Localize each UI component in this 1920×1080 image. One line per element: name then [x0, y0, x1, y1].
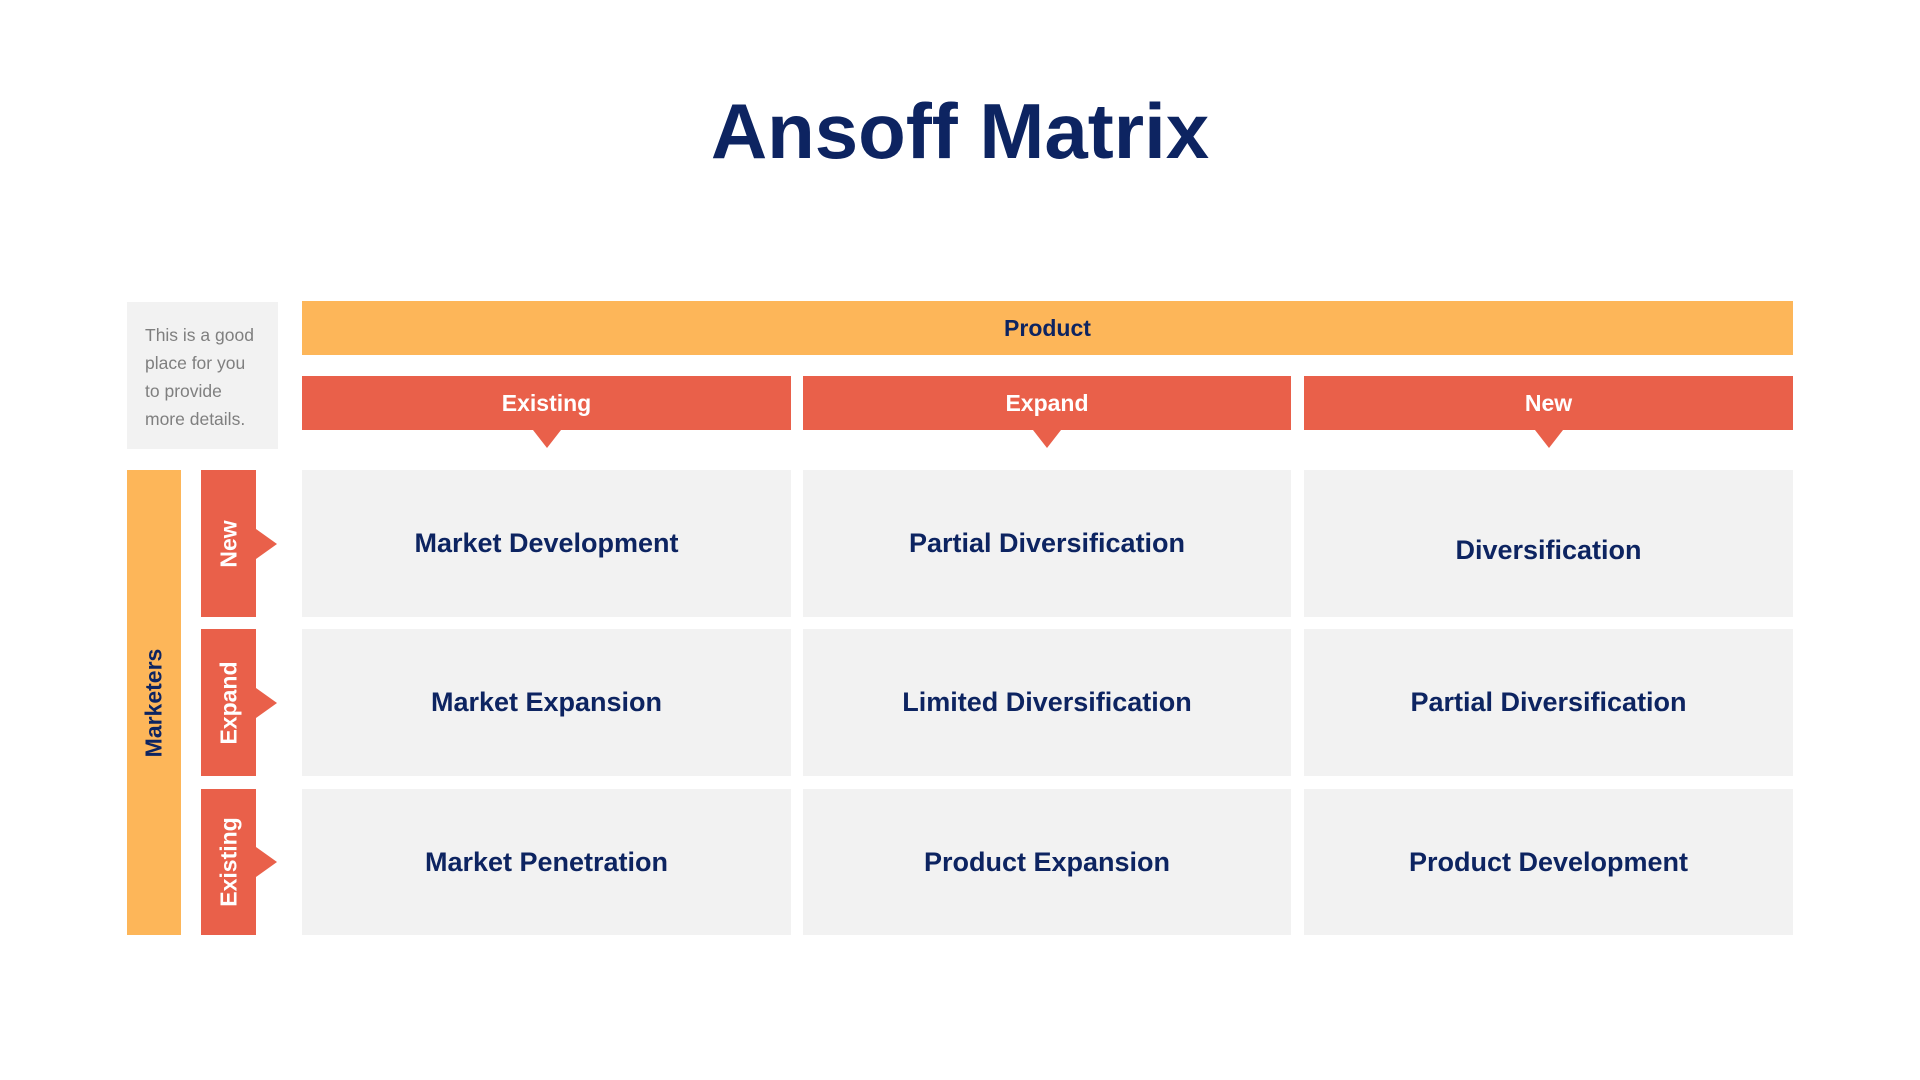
column header: new: New — [1525, 390, 1572, 416]
cell: market development — [302, 470, 791, 617]
cell: limited diversification: Limited Diversification — [902, 687, 1192, 717]
marketers bar: Marketers — [140, 648, 166, 757]
row label: expand: Expand — [215, 661, 241, 744]
marketers bar — [127, 470, 181, 935]
cell: market penetration — [302, 789, 791, 935]
row label: expand — [201, 629, 256, 776]
column header: expand: Expand — [1005, 390, 1089, 416]
column header: existing — [302, 376, 791, 430]
note box — [127, 302, 278, 449]
cell: partial diversification 2: Partial Diversification — [1410, 687, 1687, 717]
cell: product expansion — [803, 789, 1291, 935]
cell: market development: Market Development — [414, 528, 679, 558]
cell: diversification — [1304, 470, 1793, 617]
cell: product development — [1304, 789, 1793, 935]
cell: diversification: Diversification — [1455, 535, 1642, 565]
row label: existing — [201, 789, 256, 935]
row label: new — [201, 470, 256, 617]
cell: limited diversification — [803, 629, 1291, 776]
cell: market expansion — [302, 629, 791, 776]
column header: new — [1304, 376, 1793, 430]
product bar — [302, 301, 1793, 355]
row label: existing: Existing — [215, 817, 241, 907]
row label: new: New — [215, 520, 241, 567]
title: Ansoff Matrix — [711, 87, 1209, 175]
cell: partial diversification 2 — [1304, 629, 1793, 776]
cell: market expansion: Market Expansion — [431, 687, 662, 717]
cell: market penetration: Market Penetration — [425, 846, 668, 876]
cell: product expansion: Product Expansion — [924, 846, 1170, 876]
cell: partial diversification: Partial Diversification — [909, 528, 1185, 558]
column header: expand — [803, 376, 1291, 430]
column header: existing: Existing — [502, 390, 591, 416]
product bar: Product — [1004, 314, 1091, 340]
cell: partial diversification — [803, 470, 1291, 617]
cell: product development: Product Development — [1409, 846, 1688, 876]
note box: This is a good place for you to provide more details. — [145, 325, 254, 429]
